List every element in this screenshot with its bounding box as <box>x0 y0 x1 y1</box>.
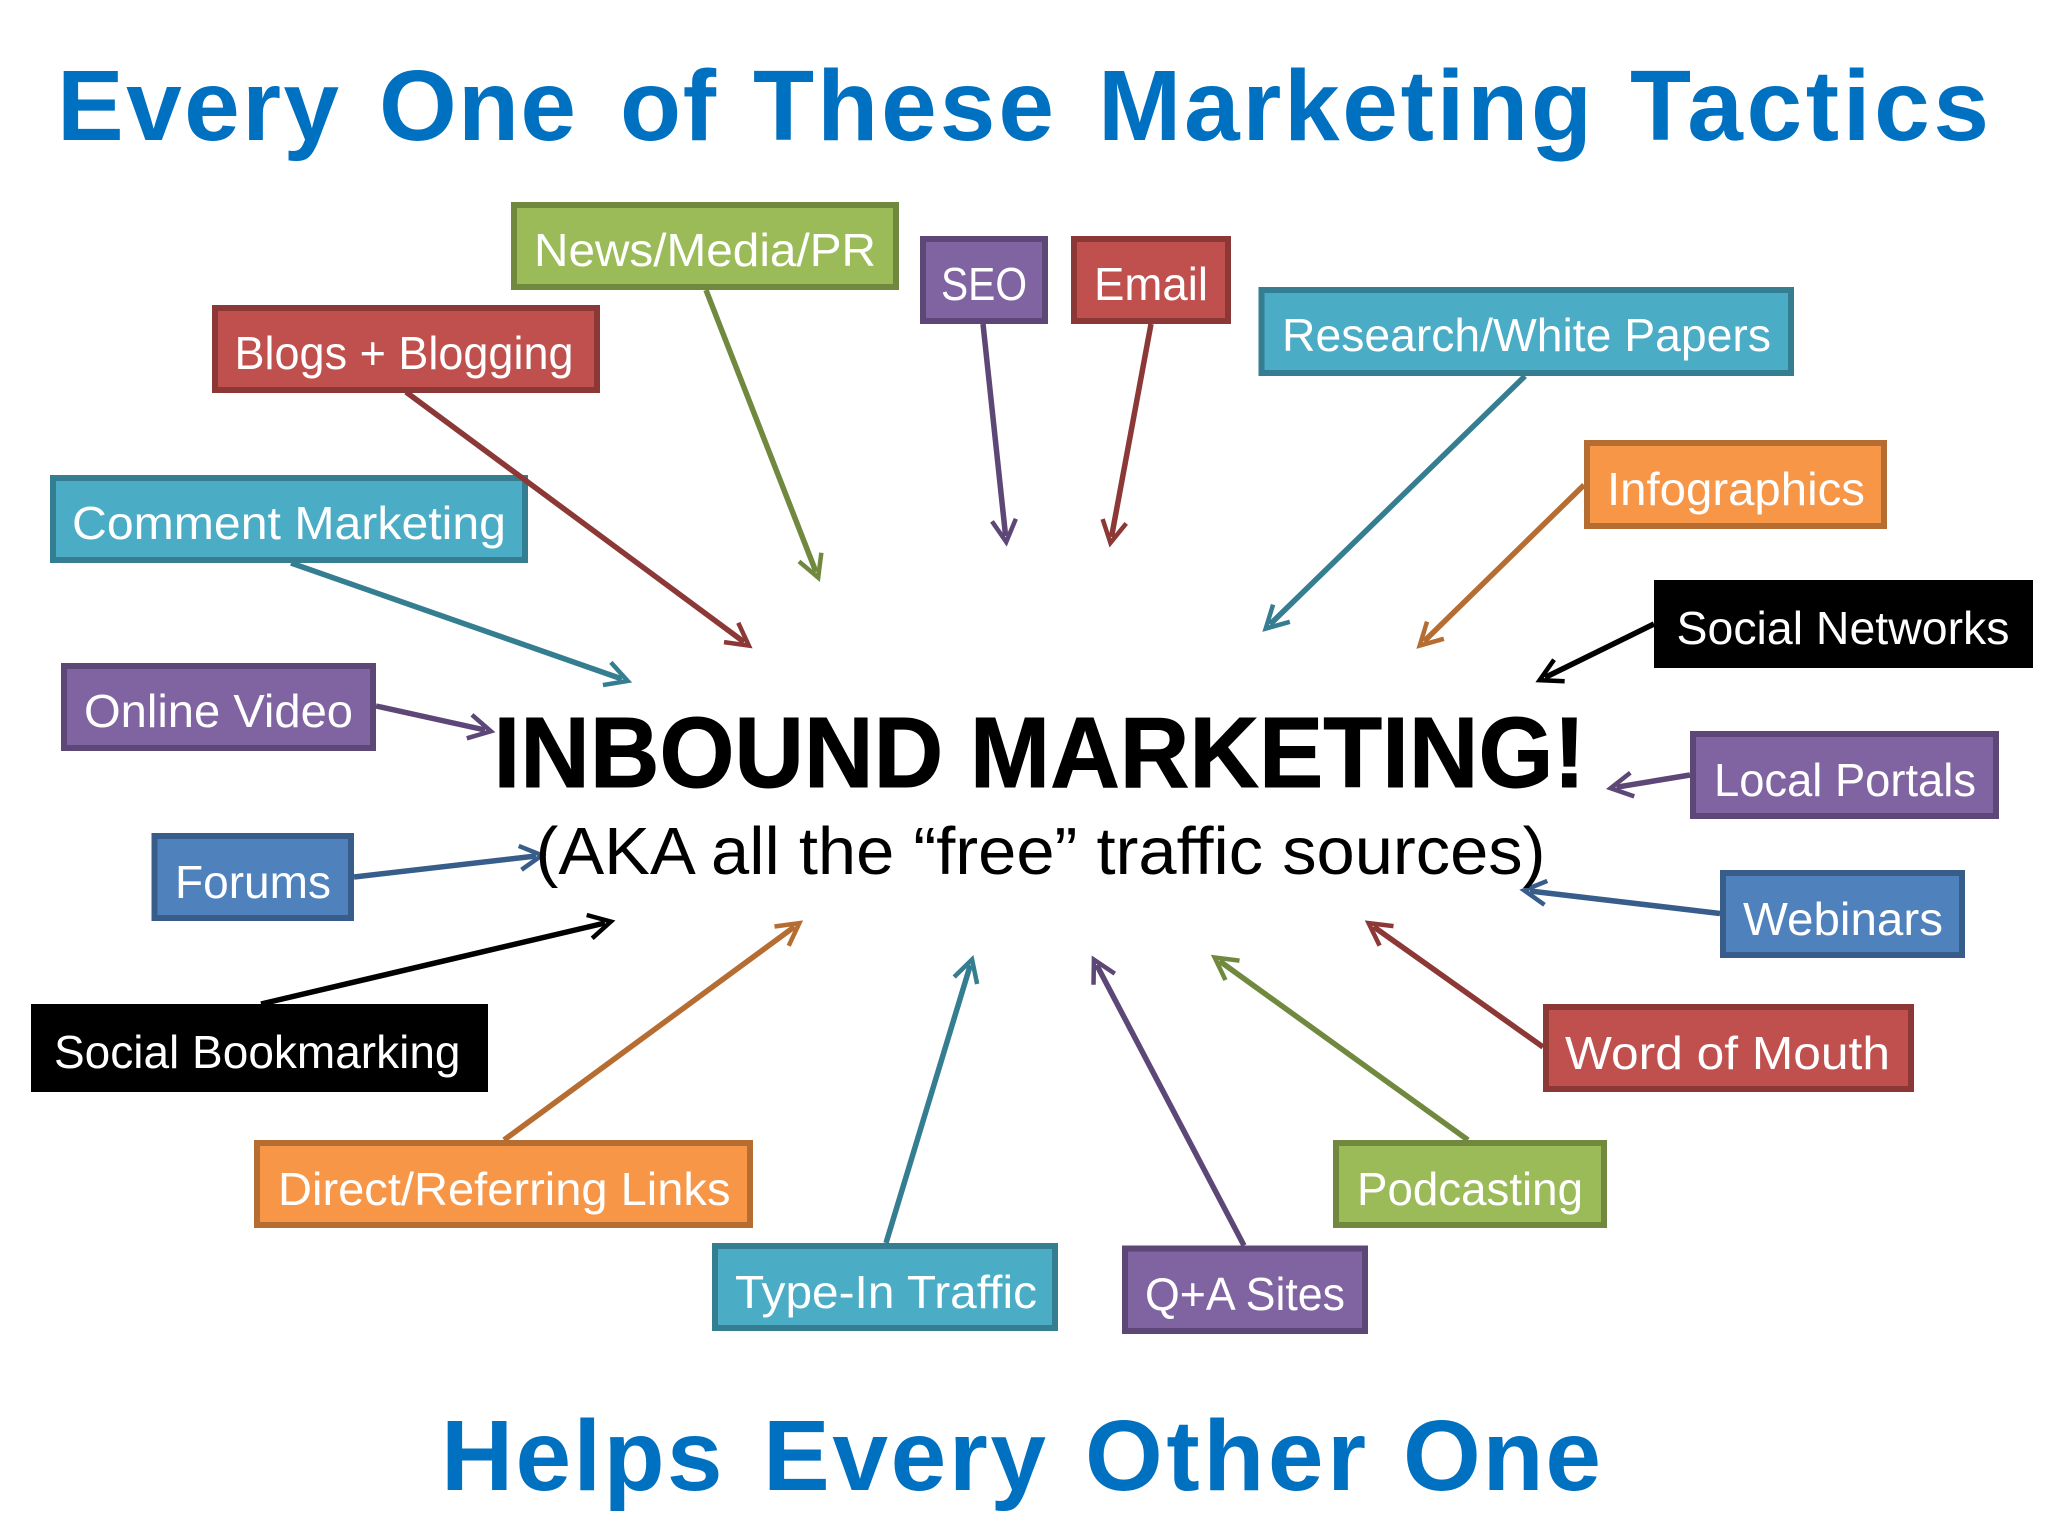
label: Forums: Forums <box>175 856 331 908</box>
arrow: Podcasting <box>1220 961 1468 1140</box>
box: Social Networks <box>1654 580 2033 668</box>
box: Social Bookmarking <box>31 1004 488 1092</box>
arrow: Social Networks <box>1545 624 1654 678</box>
label: SEO: SEO <box>941 258 1027 310</box>
panel: Social Networks tactic <box>1545 580 2033 678</box>
title: Tactics <box>1630 50 1989 162</box>
label: Online Video: Online Video <box>84 685 353 737</box>
label: Social Networks: Social Networks <box>1676 602 2010 654</box>
panel: Q+A Sites tactic <box>1097 965 1365 1331</box>
box: Local Portals <box>1693 734 1996 816</box>
arrow: Webinars <box>1530 891 1720 914</box>
box: SEO <box>923 239 1045 321</box>
closing title: Every <box>763 1400 1046 1512</box>
label: News/Media/PR: News/Media/PR <box>534 224 876 276</box>
closing title: One <box>1403 1400 1601 1512</box>
label: Local Portals: Local Portals <box>1714 754 1976 806</box>
label: Comment Marketing: Comment Marketing <box>72 497 506 549</box>
panel: Online Video tactic <box>64 666 485 748</box>
panel: Infographics tactic <box>1424 443 1884 641</box>
title: of <box>620 50 717 162</box>
label: Webinars: Webinars <box>1743 893 1943 945</box>
panel: Word of Mouth tactic <box>1374 927 1911 1089</box>
arrow: Email <box>1112 324 1151 537</box>
label: Research/White Papers: Research/White Papers <box>1282 309 1771 361</box>
arrow: News/Media/PR <box>706 290 816 572</box>
box: Email <box>1074 239 1228 321</box>
closing title <box>441 1400 1601 1512</box>
panel: Type-In Traffic tactic <box>715 965 1055 1328</box>
label: Infographics: Infographics <box>1607 463 1865 515</box>
panel: News/Media/PR tactic <box>514 205 896 572</box>
arrow: Comment Marketing <box>291 563 622 679</box>
panel: Comment Marketing tactic <box>53 478 622 679</box>
arrow: Direct/Referring Links <box>504 927 794 1140</box>
title <box>57 50 1989 162</box>
arrow: SEO <box>983 324 1006 536</box>
arrow: Forums <box>354 856 536 877</box>
label: Podcasting: Podcasting <box>1357 1163 1583 1215</box>
title: These <box>753 50 1054 162</box>
box: Word of Mouth <box>1546 1007 1911 1089</box>
box: Webinars <box>1723 873 1962 955</box>
arrow: Type-In Traffic <box>886 965 970 1243</box>
arrow: Infographics <box>1424 485 1584 641</box>
closing title: Helps <box>441 1400 722 1512</box>
box: Forums <box>154 836 351 918</box>
label: Email: Email <box>1094 258 1208 310</box>
title: Marketing <box>1098 50 1592 162</box>
panel: Local Portals tactic <box>1616 734 1996 816</box>
title: Every <box>57 50 339 162</box>
panel: Email tactic <box>1074 239 1228 537</box>
box: Infographics <box>1587 443 1884 526</box>
box: Comment Marketing <box>53 478 525 560</box>
panel: Webinars tactic <box>1530 873 1962 955</box>
arrow: Q+A Sites <box>1097 965 1244 1246</box>
box: Research/White Papers <box>1262 290 1791 373</box>
panel: Social Bookmarking tactic <box>31 923 605 1092</box>
box: Q+A Sites <box>1125 1248 1365 1331</box>
panel: SEO tactic <box>923 239 1045 536</box>
box: Podcasting <box>1336 1143 1604 1225</box>
box: Online Video <box>64 666 373 748</box>
label: Word of Mouth: Word of Mouth <box>1565 1027 1890 1079</box>
central heading: INBOUND MARKETING! <box>494 697 1586 809</box>
box: Type-In Traffic <box>715 1246 1055 1328</box>
box: News/Media/PR <box>514 205 896 287</box>
panel: Podcasting tactic <box>1220 961 1604 1225</box>
panel: Research/White Papers tactic <box>1262 290 1791 624</box>
panel: Direct/Referring Links tactic <box>257 927 794 1225</box>
arrow: Blogs + Blogging <box>406 392 744 642</box>
arrow: Social Bookmarking <box>261 923 605 1004</box>
label: Blogs + Blogging: Blogs + Blogging <box>234 327 574 379</box>
central subheading: (AKA all the “free” traffic sources) <box>536 814 1546 889</box>
closing title: Other <box>1085 1400 1366 1512</box>
arrow: Research/White Papers <box>1270 376 1525 624</box>
panel: Forums tactic <box>154 836 536 918</box>
title: One <box>379 50 576 162</box>
arrow: Online Video <box>376 706 485 730</box>
label: Q+A Sites: Q+A Sites <box>1145 1268 1345 1320</box>
label: Direct/Referring Links: Direct/Referring Links <box>278 1163 730 1215</box>
label: Type-In Traffic: Type-In Traffic <box>735 1266 1037 1318</box>
label: Social Bookmarking: Social Bookmarking <box>54 1026 460 1078</box>
box: Blogs + Blogging <box>215 308 597 390</box>
panel: Blogs + Blogging tactic <box>215 308 744 642</box>
box: Direct/Referring Links <box>257 1143 750 1225</box>
arrow: Local Portals <box>1616 775 1690 787</box>
arrow: Word of Mouth <box>1374 927 1543 1047</box>
